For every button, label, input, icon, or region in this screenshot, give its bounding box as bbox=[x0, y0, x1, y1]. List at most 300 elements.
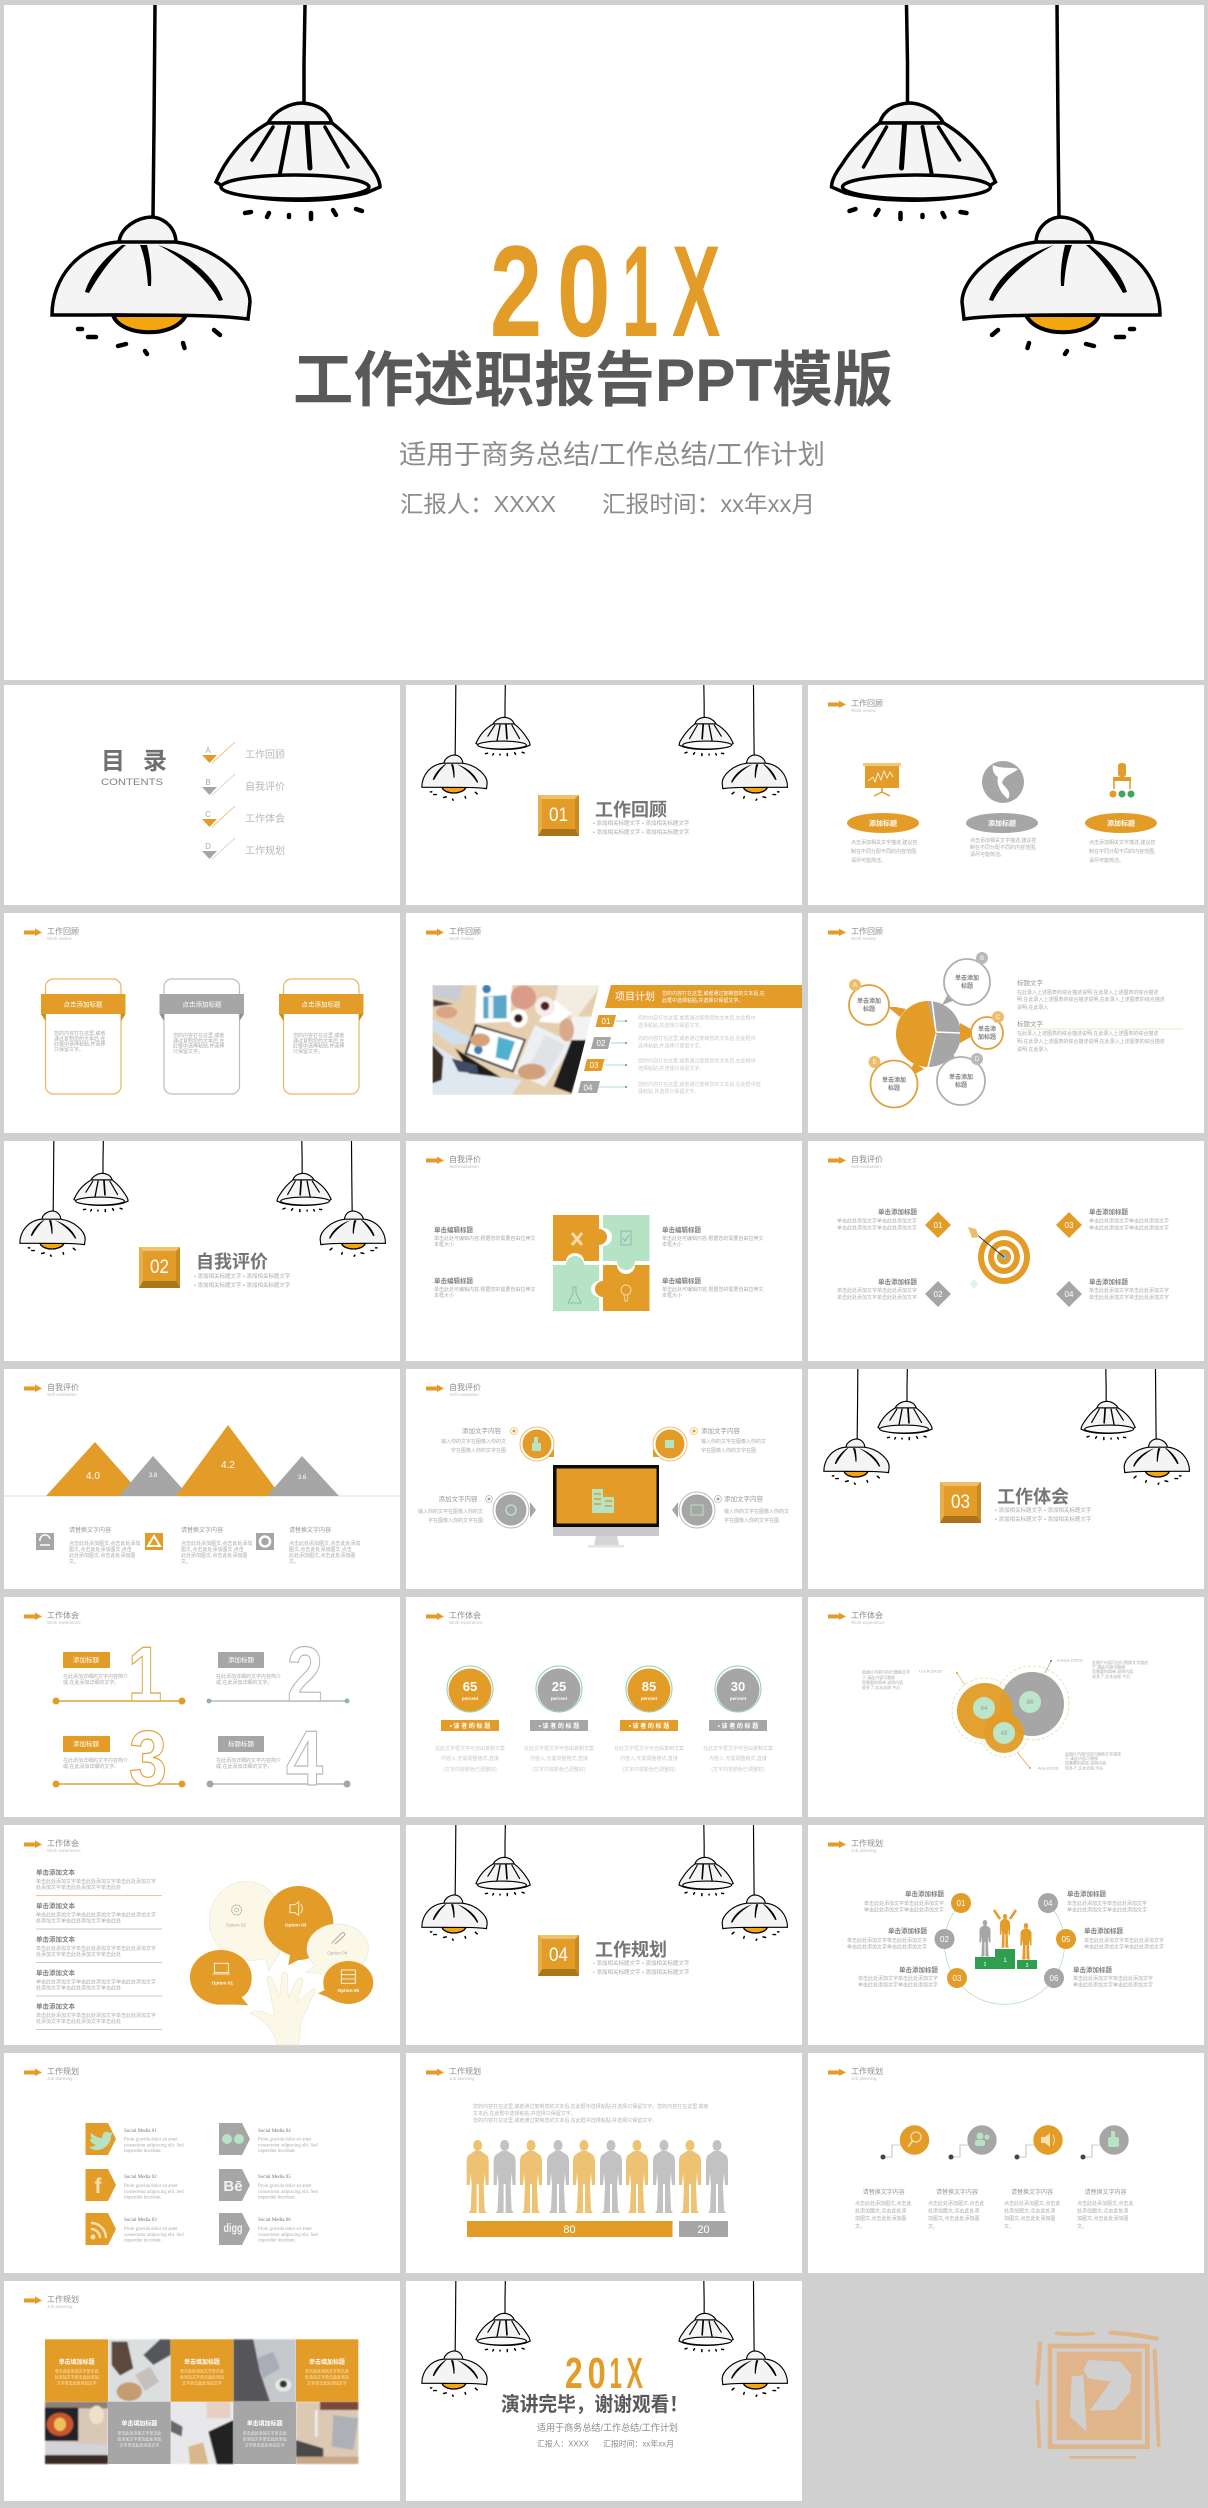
text 04: 单击添加标题 bbox=[1067, 1889, 1106, 1898]
text bottom right: 单击编辑标题 bbox=[662, 1276, 702, 1285]
node 03: 03 bbox=[953, 1974, 962, 1983]
percent 65: (文字内容颜色已调整好) bbox=[443, 1766, 497, 1773]
number badge: 04 bbox=[549, 1945, 568, 1966]
item 3: 点击此处添加图文,点击此处添加 bbox=[289, 1540, 360, 1547]
item C bbox=[202, 806, 285, 827]
year heading: 0 bbox=[588, 2349, 606, 2398]
hand and bubbles: Option 01 bbox=[212, 1981, 233, 1986]
card 3: 通过复制您的文本后,在 bbox=[293, 1037, 344, 1044]
header bbox=[426, 2066, 481, 2081]
node 03 bbox=[947, 1968, 967, 1988]
circle D: D bbox=[975, 1057, 980, 1063]
note left: 此图片内容可自行替换文字 bbox=[862, 1668, 910, 1674]
number 4 block: 4 bbox=[286, 1714, 323, 1802]
circle C: 单击添 bbox=[978, 1025, 996, 1033]
number 1 block: 1 bbox=[128, 1630, 162, 1718]
text bottom right: 本框大小 bbox=[662, 1292, 682, 1299]
text block 1: 说明,在此录入 bbox=[1017, 1004, 1048, 1011]
section subtitle: • 添加相关标题文字 • 添加相关标题文字 bbox=[593, 1968, 690, 1976]
note right bbox=[1057, 1658, 1148, 1679]
section subtitle: • 添加相关标题文字 • 添加相关标题文字 bbox=[593, 819, 690, 827]
list item 3: 单击添加文本 bbox=[36, 1934, 76, 1944]
percent 30: (文字内容颜色已调整好) bbox=[711, 1766, 765, 1773]
text block 1: 明,在此录入上述图表的综合描述说明,在此录入上述图表的综合描述 bbox=[1017, 996, 1165, 1003]
circle A bbox=[849, 979, 889, 1025]
text 03: 单击此处添加文字单击此处添加文字 bbox=[858, 1975, 938, 1982]
icon: facebook tag: f bbox=[94, 2175, 102, 2198]
cell bottom 4: 单击填加标题 bbox=[247, 2420, 283, 2428]
triangle chart bbox=[4, 1425, 400, 1496]
cell top 1: 处添加文字单击此处添加 bbox=[55, 2373, 99, 2379]
text 06: 单击此处添加文字单击此处添加文字 bbox=[1073, 1975, 1153, 1982]
percent 30: 30 bbox=[731, 1679, 745, 1694]
text 05: 单击此处添加文字单击此处添加文字 bbox=[1084, 1937, 1164, 1944]
card 1: 只保留文字。 bbox=[54, 1046, 84, 1053]
text column 4: 加图文,点击此处添加图 bbox=[1077, 2215, 1128, 2222]
header: 工作回顾 bbox=[47, 926, 79, 936]
slide: target bbox=[808, 1141, 1204, 1361]
header: 自我评价 bbox=[449, 1382, 481, 1392]
year heading bbox=[565, 2349, 643, 2398]
card 2: 通过复制您的文本后,在 bbox=[173, 1037, 224, 1044]
header bbox=[828, 1154, 883, 1169]
header bbox=[426, 1154, 481, 1169]
text bottom left: 添加文字内容 bbox=[438, 1494, 478, 1503]
puzzle pieces bbox=[553, 1215, 650, 1311]
overlapping circles: 49 bbox=[1001, 1731, 1008, 1737]
ratio bar 20 bbox=[679, 2221, 728, 2237]
social item 02: imperdiet tincidunt. bbox=[124, 2196, 162, 2200]
header: 工作回顾 bbox=[449, 926, 481, 936]
description 3: 请尽可能简洁。 bbox=[1089, 857, 1124, 864]
list item 2: 单击此处添加文字单击此处添加文字单击此处添加文字 bbox=[36, 1912, 156, 1918]
text bottom right: 添加文字内容 bbox=[724, 1494, 764, 1503]
description 1: 点击添加相关文字描述,建议控 bbox=[851, 839, 917, 846]
text 03 bbox=[1089, 1207, 1169, 1232]
slide: closing bbox=[406, 2281, 802, 2501]
label pill 2: 添加标题 bbox=[988, 818, 1016, 828]
cell bottom 4: 文字单击此处添加文字 bbox=[245, 2441, 285, 2447]
card 1: 通过复制您的文本后,在 bbox=[54, 1035, 105, 1042]
step 01: 您的内容打在这里,或者通过复制您的文本后,在此框中 bbox=[638, 1014, 756, 1022]
intro text bbox=[473, 2103, 709, 2124]
text column 2: 点击此处添加图文,点击此 bbox=[928, 2200, 984, 2207]
cell top 5: 处添加文字单击此处添加 bbox=[305, 2373, 349, 2379]
header: Job planning bbox=[47, 2304, 73, 2309]
text column 1: 点击此处添加图文,点击此 bbox=[855, 2200, 911, 2207]
cell bottom 4 bbox=[233, 2402, 296, 2464]
text column 2: 请替换文字内容 bbox=[936, 2188, 978, 2196]
header: 工作规划 bbox=[851, 2066, 883, 2076]
text column 4 bbox=[1077, 2188, 1133, 2230]
item 1: 请替换文字内容 bbox=[69, 1526, 111, 1534]
project plan banner: 项目计划 bbox=[615, 990, 655, 1003]
text 01: 单击此处添加文字单击此处添加文字 bbox=[864, 1906, 944, 1914]
item 1: 图文,点击此处添加图文,点击 bbox=[69, 1546, 132, 1553]
social item 04 bbox=[258, 2129, 318, 2154]
number badge: 03 bbox=[951, 1492, 970, 1513]
circle B: 标题 bbox=[961, 982, 973, 990]
social item 05 bbox=[258, 2175, 318, 2200]
text bottom right: 字在图像入你的文字在图 bbox=[724, 1517, 779, 1524]
text 06: 单击添加标题 bbox=[1073, 1965, 1112, 1974]
social item 03: imperdiet tincidunt. bbox=[124, 2238, 162, 2244]
note right: 此图片内容可自行替换文字描述 bbox=[1092, 1659, 1148, 1665]
central pie with arrows bbox=[888, 983, 978, 1079]
photo: laptop on desk bbox=[296, 2402, 358, 2464]
text bottom left bbox=[418, 1494, 492, 1524]
description 1: 请尽可能简洁。 bbox=[851, 857, 886, 864]
text 03: 单击添加标题 bbox=[899, 1965, 938, 1974]
text column 4: 请替换文字内容 bbox=[1084, 2188, 1127, 2196]
percent 25: percent bbox=[551, 1696, 568, 1701]
label pill 3: 添加标题 bbox=[1107, 818, 1135, 828]
text 02: 单击此处添加文字单击此处添加文字 bbox=[847, 1944, 927, 1950]
text block 2 bbox=[1017, 1019, 1183, 1053]
icon: flickr tag bbox=[219, 2123, 250, 2155]
number 4 block bbox=[206, 1714, 350, 1802]
number 1 block: 或,在此添加详细的文字。 bbox=[63, 1679, 119, 1686]
project plan banner bbox=[605, 985, 802, 1008]
year heading: 1 bbox=[610, 2350, 622, 2398]
text top left: 单击编辑标题 bbox=[434, 1225, 474, 1234]
card 3: 只保留文字。 bbox=[293, 1048, 323, 1055]
description 3 bbox=[1089, 839, 1155, 864]
year heading: X bbox=[626, 2349, 643, 2398]
text column 4: 文。 bbox=[1077, 2223, 1087, 2230]
list item 5: 单击此处添加文字单击此处添加文字单击此处添加文字 bbox=[36, 2012, 156, 2019]
header bbox=[828, 1838, 883, 1853]
hand and bubbles: Option 05 bbox=[338, 1988, 359, 1993]
item 1: 文。 bbox=[69, 1558, 79, 1565]
year heading: X bbox=[672, 220, 721, 364]
cell top 3: 单击填加标题 bbox=[184, 2358, 220, 2366]
card 2: 此框中选择粘贴,并选择 bbox=[173, 1043, 224, 1050]
description 2: 点击添加相关文字描述,建议控 bbox=[970, 837, 1036, 844]
closing title: 演讲完毕，谢谢观看！ bbox=[501, 2392, 688, 2416]
text block 2: 明,在此录入上述图表的综合描述说明,在此录入上述图表的综合描述 bbox=[1017, 1038, 1165, 1045]
item D: D bbox=[205, 842, 211, 851]
label pill 1 bbox=[847, 813, 919, 833]
item C: C bbox=[205, 810, 211, 819]
text 04: 单击添加标题 bbox=[1089, 1277, 1128, 1286]
item D: 工作规划 bbox=[245, 844, 285, 857]
text bottom left: 字在图像入你的文字在图 bbox=[428, 1517, 483, 1524]
text block 1 bbox=[1017, 978, 1165, 1011]
circle E: E bbox=[872, 1060, 877, 1066]
icon: behance tag: Bē bbox=[223, 2178, 243, 2195]
number badge bbox=[538, 1935, 579, 1976]
section subtitle: • 添加相关标题文字 • 添加相关标题文字 bbox=[593, 828, 690, 836]
percent 65: 65 bbox=[463, 1679, 477, 1694]
hanging lamps bbox=[422, 1825, 787, 1940]
list item 3: 处添加文字单击此处添加文字单击此处 bbox=[36, 1951, 121, 1958]
social item 06: Social Media 06 bbox=[258, 2218, 291, 2223]
icon: digg tag: digg bbox=[224, 2221, 242, 2235]
header: 自我评价 bbox=[851, 1154, 883, 1164]
social item 01: Proin gravida dolor sit amet bbox=[124, 2138, 178, 2142]
circle B bbox=[944, 952, 990, 1005]
text top right: 添加文字内容 bbox=[701, 1426, 740, 1435]
header: 工作回顾 bbox=[851, 698, 883, 708]
number 3 block: 在此添加详细的文字内容简介 bbox=[63, 1757, 128, 1764]
card 3: 点击添加标题 bbox=[302, 1000, 341, 1008]
circle E bbox=[868, 1056, 918, 1108]
step 01: 01 bbox=[602, 1017, 611, 1026]
number badge bbox=[538, 795, 579, 836]
header: Job planning bbox=[47, 2076, 73, 2081]
percent 25: 内容入,无需调整格式,直接 bbox=[530, 1755, 588, 1762]
text column 3: 加图文,点击此处添加图 bbox=[1004, 2215, 1055, 2222]
step 03: 03 bbox=[590, 1061, 599, 1070]
text top right: 单击此处可编辑内容,根据您的需要自由拉伸文 bbox=[662, 1235, 763, 1242]
text block 2: 说明,在此录入 bbox=[1017, 1046, 1048, 1053]
step 01: 选择粘贴,并选择只保留文字。 bbox=[638, 1022, 704, 1029]
node 04: 04 bbox=[1044, 1899, 1053, 1908]
section subtitle: • 添加相关标题文字 • 添加相关标题文字 bbox=[995, 1515, 1092, 1523]
card 2: 您的内容打在这里,或者 bbox=[173, 1032, 224, 1039]
slide: mountain chart bbox=[4, 1369, 400, 1589]
overlapping circles bbox=[952, 1660, 1069, 1769]
text 06 bbox=[1073, 1965, 1153, 1988]
social item 04: Proin gravida dolor sit amet bbox=[258, 2138, 312, 2142]
list item 3 bbox=[36, 1934, 162, 1962]
percent 25: (文字内容颜色已调整好) bbox=[532, 1766, 586, 1773]
list item 5: 单击添加文本 bbox=[36, 2002, 76, 2010]
ratio bar 80 bbox=[467, 2221, 672, 2237]
social item 06: consectetur adipiscing elit. Sed bbox=[258, 2233, 318, 2238]
text 01: 单击此处添加文字单击此处添加文字 bbox=[837, 1218, 917, 1224]
text column 2: 加图文,点击此处添加图 bbox=[928, 2215, 979, 2222]
note left bbox=[862, 1668, 943, 1690]
header: Job planning bbox=[851, 2076, 877, 2081]
header: 自我评价 bbox=[47, 1382, 79, 1392]
icon: calendar circle bbox=[672, 1492, 715, 1528]
section subtitle: • 添加相关标题文字 • 添加相关标题文字 bbox=[593, 1959, 690, 1967]
circle E: 单击添加 bbox=[882, 1076, 906, 1084]
step 04: 您的内容打在这里,或者通过复制您的文本后,在此框中选 bbox=[638, 1081, 761, 1088]
header bbox=[24, 2066, 79, 2081]
triangle chart: 3.8 bbox=[149, 1473, 158, 1479]
social item 03: Proin gravida dolor sit amet bbox=[124, 2227, 178, 2232]
year heading: 2 bbox=[490, 219, 542, 365]
slide: people ratio bbox=[406, 2053, 802, 2273]
list item 2: 单击添加文本 bbox=[36, 1901, 76, 1910]
monitor bbox=[553, 1465, 659, 1548]
item 2: 此处添加图文,点击此处添加图 bbox=[181, 1552, 247, 1559]
card 2 bbox=[160, 979, 244, 1094]
text 05 bbox=[1084, 1926, 1164, 1950]
text 03: 单击此处添加文字单击此处添加文字 bbox=[858, 1982, 938, 1988]
cell top 5: 单击此处添加文字单击此 bbox=[305, 2367, 349, 2373]
slide: podium bbox=[808, 1825, 1204, 2045]
section title: 自我评价 bbox=[196, 1252, 268, 1272]
header bbox=[24, 926, 79, 941]
card 3 bbox=[279, 979, 364, 1094]
number 2 block: 或,在此添加详细的文字。 bbox=[216, 1679, 272, 1686]
header: 工作回顾 bbox=[851, 926, 883, 936]
percent 25: 在此文字框文字可自由复制文案 bbox=[524, 1745, 594, 1752]
item 2 bbox=[145, 1526, 252, 1565]
diamond 04: 04 bbox=[1065, 1290, 1074, 1299]
slide: project plan bbox=[406, 913, 802, 1133]
header: Work review bbox=[851, 936, 876, 941]
diamond 04 bbox=[1056, 1281, 1082, 1307]
number 2 block bbox=[206, 1630, 350, 1718]
section subtitle: • 添加相关标题文字 • 添加相关标题文字 bbox=[995, 1506, 1092, 1514]
hand and bubbles: Option 04 bbox=[327, 1951, 348, 1956]
cell top 3: 处添加文字单击此处添加 bbox=[180, 2373, 224, 2379]
text bottom left: 单击此处可编辑内容,根据您的需要自由拉伸文 bbox=[434, 1286, 535, 1293]
note right: Europe (2015) bbox=[1057, 1658, 1083, 1662]
header: Self-evaluation bbox=[851, 1164, 881, 1169]
overlapping circles: 86 bbox=[1027, 1700, 1034, 1706]
triangle chart: 3.6 bbox=[298, 1475, 307, 1481]
percent 65 bbox=[435, 1666, 505, 1773]
header: Work experience bbox=[449, 1620, 483, 1625]
social item 02: Social Media 02 bbox=[124, 2175, 157, 2180]
hand and bubbles: Option 02 bbox=[226, 1923, 246, 1928]
text bottom right: 输入你的文字在图像入你的文 bbox=[724, 1508, 789, 1515]
step 02: 您的内容打在这里,或者通过复制您的文本后,在此框中 bbox=[638, 1035, 756, 1042]
project plan banner: 此框中选择粘贴,并选择只保留文字。 bbox=[662, 997, 743, 1004]
orbit ring bbox=[944, 1903, 1064, 2004]
item B: 自我评价 bbox=[245, 780, 285, 793]
slide: cover bbox=[4, 5, 1204, 680]
social item 03: Social Media 03 bbox=[124, 2218, 157, 2223]
card 1: 此框中选择粘贴,并选择 bbox=[54, 1041, 105, 1048]
icon: behance tag bbox=[219, 2169, 250, 2201]
slide: section 04 bbox=[406, 1825, 802, 2045]
text 01: 单击添加标题 bbox=[905, 1889, 944, 1898]
text 01: 单击添加标题 bbox=[878, 1207, 918, 1216]
text column 3: 点击此处添加图文,点击此 bbox=[1004, 2200, 1060, 2207]
note right: 于,请此内容可替换 bbox=[1092, 1664, 1125, 1670]
header: Self-evaluation bbox=[449, 1164, 479, 1169]
circle C: 加标题 bbox=[978, 1033, 996, 1041]
icon: digg tag bbox=[219, 2213, 250, 2245]
description 1 bbox=[851, 839, 917, 864]
node 05 bbox=[1056, 1929, 1076, 1949]
text top left: 添加文字内容 bbox=[462, 1426, 502, 1435]
header: Work experience bbox=[47, 1620, 81, 1625]
item 2: 文。 bbox=[181, 1558, 191, 1565]
icon: hierarchy bbox=[1110, 763, 1134, 798]
slide: section 02 bbox=[4, 1141, 400, 1361]
number 4 block: 标题标题 bbox=[228, 1739, 254, 1748]
text 06: 单击此处添加文字单击此处添加文字 bbox=[1073, 1982, 1153, 1988]
social item 02 bbox=[124, 2175, 184, 2200]
social item 03 bbox=[124, 2218, 184, 2244]
triangle chart: 4.0 bbox=[86, 1471, 100, 1482]
step 02: 选择粘贴,并选择只保留文字。 bbox=[638, 1042, 704, 1050]
year heading: 1 bbox=[622, 218, 658, 364]
text 04 bbox=[1067, 1889, 1147, 1914]
header: Job planning bbox=[851, 1848, 877, 1853]
photo: laptop in room bbox=[45, 2402, 108, 2464]
cell top 1: 文字单击此处添加文字 bbox=[57, 2379, 97, 2385]
subtitle: 适用于商务总结/工作总结/工作计划 bbox=[399, 440, 825, 470]
hanging lamps bbox=[824, 1369, 1189, 1484]
header: 工作体会 bbox=[47, 1610, 79, 1620]
icon: thumbs up bbox=[1080, 2125, 1129, 2160]
text 02: 单击此处添加文字单击此处添加文字 bbox=[837, 1294, 917, 1301]
header: Self-evaluation bbox=[449, 1392, 479, 1397]
slide: puzzle bbox=[406, 1141, 802, 1361]
percent 30 bbox=[703, 1666, 773, 1773]
item 3: 此处添加图文,点击此处添加图 bbox=[289, 1552, 355, 1559]
year heading: 2 bbox=[565, 2349, 583, 2398]
header: 工作规划 bbox=[449, 2066, 481, 2076]
header bbox=[828, 926, 883, 941]
percent 30: 内容入,无需调整格式,直接 bbox=[709, 1755, 767, 1762]
social item 05: Social Media 05 bbox=[258, 2175, 291, 2180]
contents subheading: CONTENTS bbox=[101, 777, 163, 787]
text top right bbox=[690, 1426, 766, 1454]
slide: monitor bbox=[406, 1369, 802, 1589]
list item 5 bbox=[36, 2002, 162, 2030]
note left: 您需要的简单,说明内容 bbox=[862, 1679, 903, 1685]
slide: image grid bbox=[4, 2281, 400, 2501]
percent 65: 在此文字框文字可自由复制文案 bbox=[435, 1745, 505, 1752]
text bottom left: 输入你的文字在图像入你的文 bbox=[418, 1508, 483, 1515]
step 03: 您的内容打在这里,或者通过复制您的文本后,在此框中 bbox=[638, 1058, 756, 1064]
slide: four circles bbox=[808, 2053, 1204, 2273]
text 04: 单击此处添加文字单击此处添加文字 bbox=[1067, 1906, 1147, 1914]
slide: three icons bbox=[808, 685, 1204, 905]
circle A: A bbox=[853, 983, 857, 989]
cell bottom 2: 文字单击此处添加文字 bbox=[119, 2441, 159, 2447]
number badge bbox=[139, 1247, 180, 1288]
hanging lamps bbox=[20, 1141, 385, 1256]
slide: speech bubbles bbox=[4, 1825, 400, 2045]
social item 02: consectetur adipiscing elit. Sed bbox=[124, 2190, 184, 2195]
subtitle: 适用于商务总结/工作总结/工作计划 bbox=[537, 2422, 678, 2434]
item C: 工作体会 bbox=[245, 812, 285, 825]
circle B: 单击添加 bbox=[955, 974, 979, 982]
cell top 5: 文字单击此处添加文字 bbox=[307, 2379, 347, 2385]
hand and bubbles bbox=[190, 1881, 373, 2045]
card 1: 点击添加标题 bbox=[64, 1000, 103, 1008]
header: 工作规划 bbox=[851, 1838, 883, 1848]
triangle chart: 4.2 bbox=[221, 1460, 235, 1471]
text top left: 字在图像入你的文字在图 bbox=[451, 1447, 506, 1454]
node 06: 06 bbox=[1050, 1974, 1059, 1983]
text top right bbox=[662, 1225, 763, 1248]
presenter: 汇报人：XXXX bbox=[537, 2438, 590, 2448]
section title: 工作体会 bbox=[997, 1487, 1069, 1507]
text 01: 单击此处添加文字单击此处添加文字 bbox=[864, 1900, 944, 1907]
number 3 block bbox=[52, 1714, 186, 1802]
description 3: 制在不同分配不同的内容范围, bbox=[1089, 848, 1155, 855]
node 04 bbox=[1038, 1893, 1058, 1913]
slide: radial circles bbox=[808, 913, 1204, 1133]
header bbox=[828, 2066, 883, 2081]
header: Work review bbox=[449, 936, 474, 941]
list item 1: 单击添加文本 bbox=[36, 1868, 76, 1876]
cell bottom 2 bbox=[108, 2402, 171, 2464]
header: Self-evaluation bbox=[47, 1392, 77, 1397]
number 3 block: 添加标题 bbox=[73, 1739, 100, 1748]
photo: team at desk bbox=[432, 985, 602, 1095]
social item 05: imperdiet tincidunt. bbox=[258, 2196, 296, 2200]
contents heading: 目录 bbox=[101, 748, 167, 775]
text 04: 单击此处添加文字单击此处添加文字 bbox=[1067, 1900, 1147, 1907]
circle D bbox=[937, 1053, 985, 1105]
list item 4: 处添加文字单击此处添加文字单击此处 bbox=[36, 1984, 121, 1992]
list item 3: 单击此处添加文字单击此处添加文字单击此处添加文字 bbox=[36, 1945, 156, 1952]
header bbox=[828, 698, 883, 713]
